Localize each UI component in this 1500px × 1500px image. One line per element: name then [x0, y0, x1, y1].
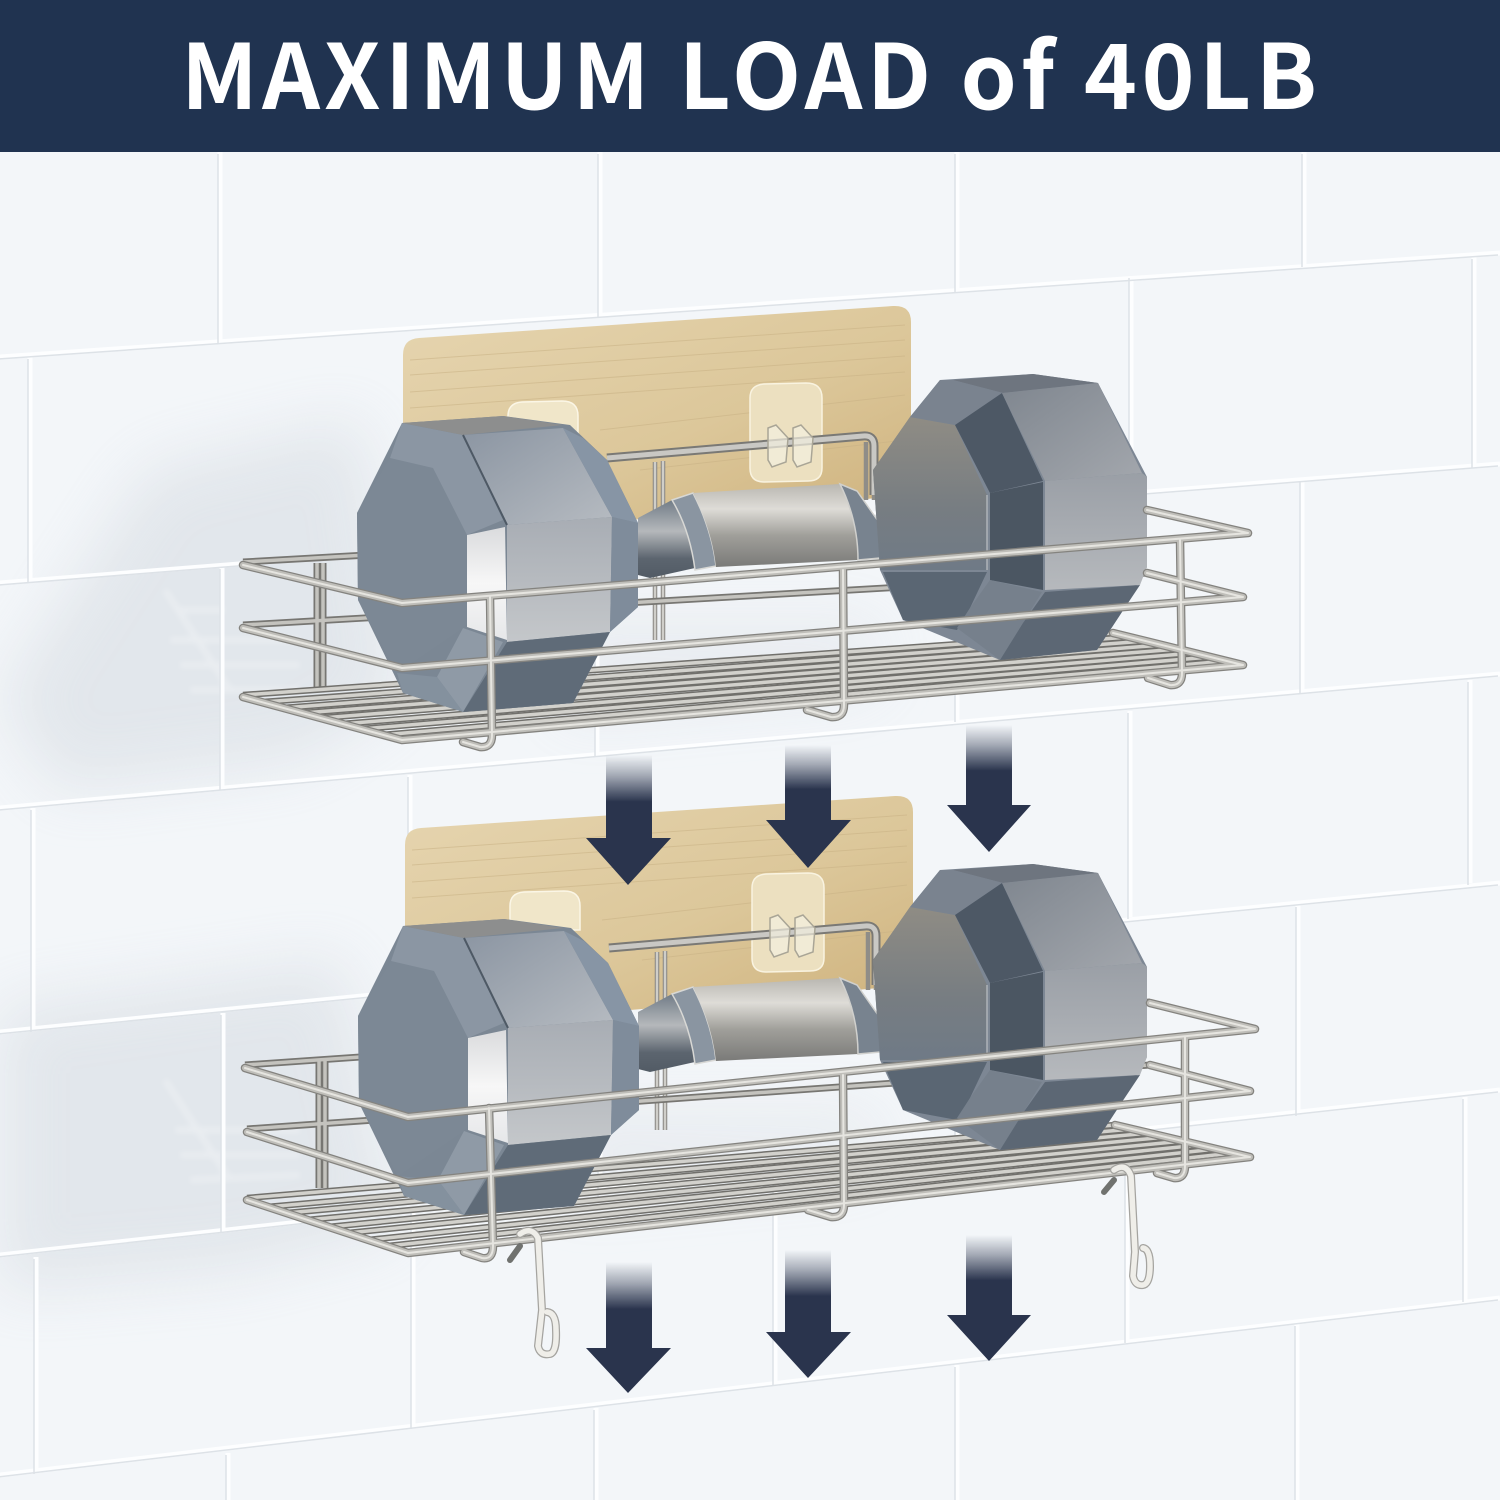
basket back wires: top — [243, 511, 1150, 687]
arrow: bottom row left — [586, 1262, 671, 1393]
bottom shelf with dumbbell — [245, 796, 1255, 1258]
basket front rails: bottom — [245, 1003, 1255, 1258]
arrow: top row middle — [766, 745, 851, 868]
arrow: bottom row middle — [766, 1250, 851, 1378]
title: MAXIMUM LOAD of 40LB — [181, 5, 1317, 135]
adhesive plate with hooks: top — [403, 306, 911, 640]
adhesive plate with hooks: bottom — [405, 796, 913, 1130]
hanging hook: right — [1104, 1167, 1150, 1285]
arrow: top row left — [586, 755, 671, 885]
arrow: top row right — [947, 725, 1031, 852]
basket floor slats: top — [243, 633, 1227, 735]
arrow: bottom row right — [947, 1235, 1031, 1361]
top shelf with dumbbell — [243, 306, 1248, 747]
hanging hook: left — [510, 1231, 556, 1354]
header banner — [0, 0, 1500, 152]
dumbbell: bottom — [358, 864, 1147, 1215]
basket back wires: bottom — [245, 1002, 1150, 1188]
basket floor slats: bottom — [247, 1125, 1233, 1246]
basket front rails: top — [243, 510, 1248, 747]
dumbbell: top — [357, 374, 1147, 712]
